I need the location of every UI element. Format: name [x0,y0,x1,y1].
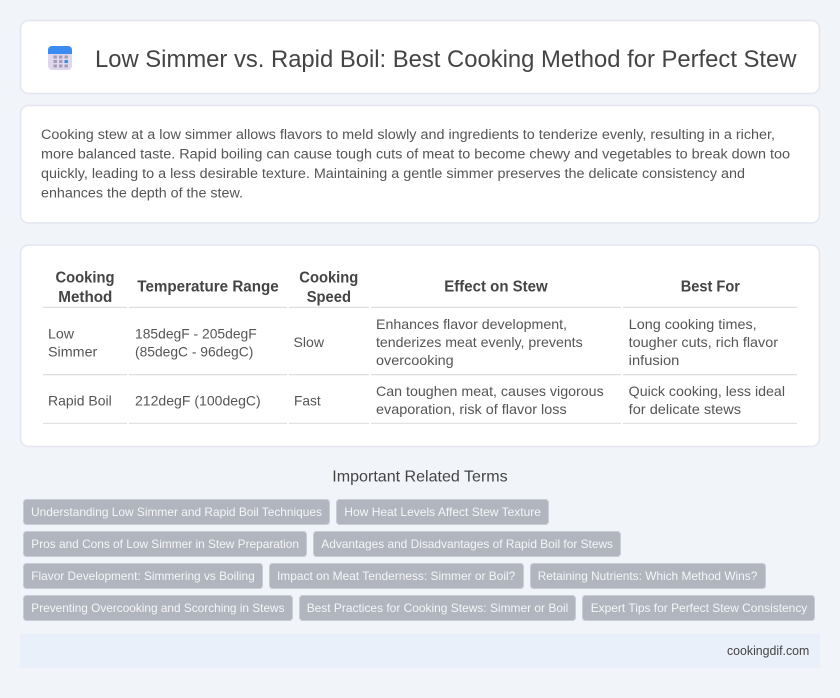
chip: retaining nutrients [530,564,766,588]
table row: low simmer: tougher cuts, rich flavor [629,335,778,350]
table header row: Effect on Stew [444,279,549,296]
text block: introduction: Cooking stew at a low simmer allows flavors to meld slowly and ingredients to tenderize evenly, resulting in a richer, [41,127,775,143]
chip: heat levels: How Heat Levels Affect Stew Texture [344,505,541,519]
chip: advantages and disadvantages: Advantages and Disadvantages of Rapid Boil for Stews [321,537,613,551]
table row: low simmer: infusion [629,353,679,368]
chip: flavor development [24,564,262,588]
table row: low simmer: overcooking [376,353,454,368]
table header row: Speed [307,289,351,306]
text block: introduction: more balanced taste. Rapid boiling can cause tough cuts of meat to become chewy and vegetables to break down too [41,146,790,162]
chip: pros and cons: Pros and Cons of Low Simmer in Stew Preparation [31,537,299,551]
table row: rapid boil: Quick cooking, less ideal [629,384,785,399]
chip: pros and cons [24,532,306,556]
panel: introduction [20,106,820,223]
heading: related terms: Important Related Terms [332,469,508,486]
table header row: Best For [681,279,740,296]
chip: meat tenderness [270,564,524,588]
table row: rapid boil: 212degF (100degC) [135,393,261,408]
chip: advantages and disadvantages [314,532,620,556]
chip: preventing overcooking: Preventing Overcooking and Scorching in Stews [31,601,284,615]
table row: low simmer: Enhances flavor development, [376,317,567,332]
table header row: Cooking [299,270,358,287]
panel: related term chips [24,500,814,620]
table row: low simmer: (85degC - 96degC) [135,344,253,359]
panel: comparison table [20,245,820,446]
table row: low simmer: Low [48,326,74,341]
panel: header [20,20,820,94]
table row: rapid boil [43,384,797,423]
chip: best practices [300,596,576,620]
table header row: Cooking [56,270,114,287]
chip: preventing overcooking [24,596,292,620]
table row: rapid boil: for delicate stews [629,402,741,417]
chip: expert tips [582,596,814,620]
table header row: Temperature Range [137,279,279,296]
chip: flavor development: Flavor Development: Simmering vs Boiling [31,569,255,583]
chip: understanding techniques: Understanding Low Simmer and Rapid Boil Techniques [31,505,322,519]
chip: understanding techniques [24,500,330,524]
chip: best practices: Best Practices for Cooking Stews: Simmer or Boil [307,601,568,615]
table header row [43,270,797,307]
text block: introduction: quickly, leading to a less desirable texture. Maintaining a gentle simmer preserves the delicate consistency and [41,166,745,182]
table row: low simmer: tenderizes meat evenly, prevents [376,335,583,350]
chip: meat tenderness: Impact on Meat Tenderness: Simmer or Boil? [277,569,516,583]
footer [20,634,820,668]
icon: calendar [48,46,72,70]
table row: rapid boil: Fast [294,393,321,408]
chip: heat levels [336,500,548,524]
table row: rapid boil: Can toughen meat, causes vigorous [376,384,604,399]
table row: low simmer: Long cooking times, [629,317,757,332]
chip: expert tips: Expert Tips for Perfect Stew Consistency [591,601,807,615]
table row: low simmer: Slow [294,335,324,350]
table row: low simmer: 185degF - 205degF [135,326,257,341]
text block: introduction [41,127,790,202]
title: Low Simmer vs. Rapid Boil: Best Cooking Method for Perfect Stew [95,46,797,73]
table header row: Method [58,289,112,306]
table row: low simmer: Simmer [48,344,98,359]
footer source text: cookingdif.com [727,644,809,658]
text block: introduction: enhances the depth of the stew. [41,186,243,202]
table row: low simmer [43,317,797,375]
table row: rapid boil: evaporation, risk of flavor loss [376,402,567,417]
chip: retaining nutrients: Retaining Nutrients: Which Method Wins? [538,569,758,583]
table row: rapid boil: Rapid Boil [48,393,112,408]
